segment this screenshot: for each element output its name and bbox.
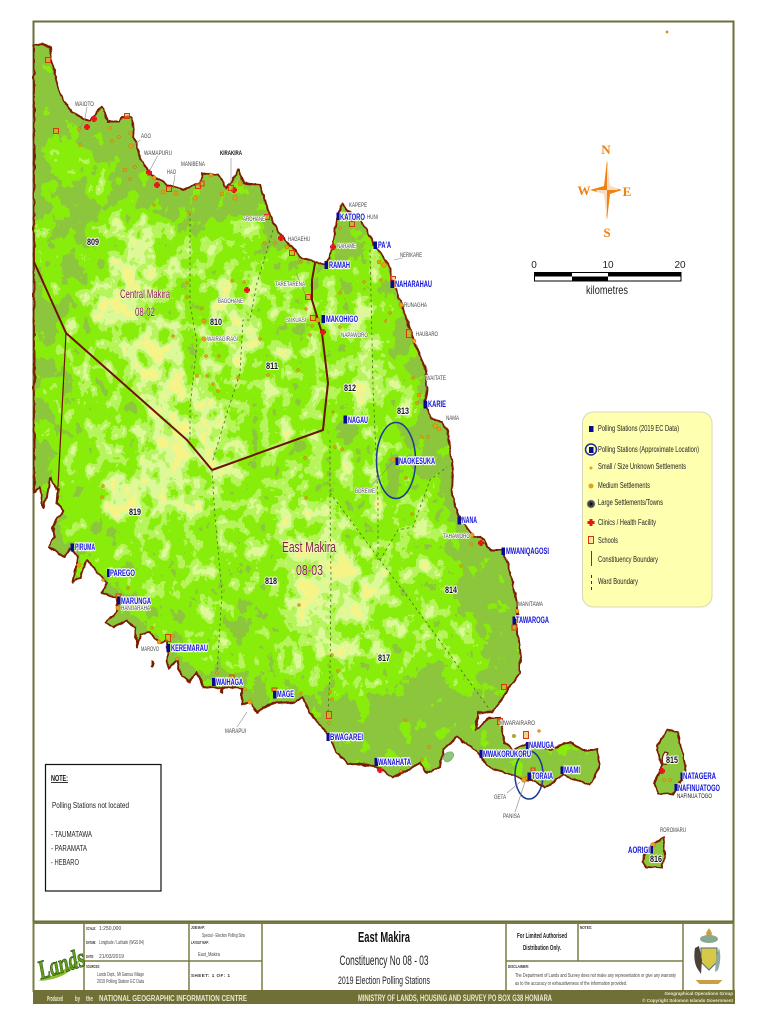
station labels: RAMAH — [329, 260, 350, 270]
compass rose: W — [578, 183, 590, 198]
map info: sources: Lands Dept., Mt Gamua Village — [97, 972, 144, 978]
station squares — [70, 212, 684, 854]
note box: - PARAMATA — [51, 843, 87, 853]
polling station circle: Toraia — [515, 751, 543, 799]
constituency name: East Makira: 08-03 — [296, 562, 323, 579]
legend: large settlements: Large Settlements/Towns — [598, 498, 663, 507]
scale bar: 0 — [531, 260, 537, 271]
map info: scale datum date: 21/03/2019 — [99, 954, 124, 960]
notes label: NOTES: — [580, 925, 592, 930]
bay in island 815 — [662, 752, 668, 764]
footer band: NATIONAL GEOGRAPHIC INFORMATION CENTRE — [99, 994, 248, 1003]
ward numbers: 819 — [129, 507, 141, 517]
distribution note: For Limited Authorised — [517, 931, 567, 940]
note box: Polling Stations not located — [52, 800, 129, 810]
station labels: MWAKORUKORU — [483, 749, 531, 759]
settlements — [77, 31, 672, 848]
constituency name: East Makira — [282, 539, 336, 579]
legend: ward boundary: Ward Boundary — [598, 577, 638, 586]
station labels: MWANIQAGOSI — [506, 546, 549, 556]
station labels — [75, 212, 720, 855]
Lands logo — [33, 942, 89, 985]
place labels: WAIRAGIRAGI — [207, 337, 238, 343]
station labels: KEREMARAU — [171, 643, 208, 653]
place labels: HAGAEHU — [288, 237, 310, 243]
ward numbers: 812 — [344, 383, 356, 393]
station labels: MAMI — [564, 765, 580, 775]
legend: medium settlements — [588, 481, 650, 490]
place labels: TAHAWORO — [443, 534, 470, 540]
footer band: Geographical Operations Group — [664, 991, 733, 996]
map info: scale datum date: DATE: — [86, 954, 94, 959]
constituency name: Central Makira: 08-02 — [135, 305, 155, 319]
map info: job and layout: East_Makira — [198, 952, 220, 958]
land fill: main island — [34, 43, 600, 788]
polling station circle: Naokesuka — [376, 422, 416, 498]
footer band: Produced — [47, 994, 63, 1003]
place labels: NERIKARE — [400, 253, 422, 259]
map info: sheet: SHEET: 1 OF: 1 — [191, 973, 230, 978]
small islet — [443, 752, 454, 762]
ward numbers: 815 — [666, 755, 678, 765]
station labels: BWAGAREI — [330, 732, 363, 742]
place labels: MAROVO — [141, 647, 159, 653]
note box: NOTE: — [51, 773, 68, 783]
compass rose — [578, 142, 631, 240]
constituency boundary — [34, 262, 328, 487]
place labels: PANISA — [503, 814, 520, 820]
disclaimer: as to the accuracy or exhaustiveness of the information provided. — [515, 981, 627, 987]
map info: sources: SOURCES: — [86, 964, 100, 969]
station labels: PA'A — [378, 240, 391, 250]
scale bar — [531, 260, 686, 297]
Lands logo: Lands — [33, 942, 89, 985]
station labels: WANAHATA — [378, 757, 411, 767]
place labels: MARAPUI — [225, 729, 246, 735]
map title — [338, 929, 430, 987]
ward numbers: 813 — [397, 406, 409, 416]
place labels: NARAME — [337, 244, 356, 250]
legend: medium settlements: Medium Settlements — [598, 481, 650, 490]
ward numbers — [87, 237, 678, 864]
station labels: TAWAROGA — [516, 615, 549, 625]
map info: job and layout: JOB MAP: — [191, 925, 205, 930]
ward numbers: 816 — [650, 854, 662, 864]
place labels: SUKUASI — [286, 318, 306, 324]
terrain elevation bands — [34, 43, 597, 788]
legend: small settlements: Small / Size Unknown Settlements — [598, 462, 686, 471]
station labels: KARIE — [428, 399, 446, 409]
compass rose: E — [623, 184, 631, 199]
map info: sources: 2019 Polling Station EC Data — [97, 979, 144, 985]
map: land and terrain — [32, 42, 688, 868]
map info: job and layout: Special - Election Polling Stns — [202, 933, 245, 939]
map info: scale datum date: DATUM: — [86, 940, 96, 945]
place labels: WAMAPURU — [144, 151, 172, 157]
station labels: WAIHAGA — [216, 677, 243, 687]
footer band: © Copyright Solomon Islands Government — [642, 997, 733, 1003]
ward numbers: 817 — [378, 653, 390, 663]
place labels: AROHANE — [243, 217, 265, 223]
station labels: NAGAU — [348, 415, 368, 425]
ward numbers: 810 — [210, 317, 222, 327]
legend: constituency boundary — [592, 551, 658, 566]
ward numbers: 818 — [265, 576, 277, 586]
place labels: NAFINUA TOGO — [677, 794, 712, 800]
place labels: BAGOHANE — [218, 299, 243, 305]
place labels: RUNAGHA — [404, 303, 427, 309]
legend: schools — [588, 536, 618, 545]
station labels: MAKOHIGO — [326, 314, 358, 324]
constituency name: Central Makira — [120, 287, 170, 319]
footer band — [33, 990, 735, 1004]
place labels: GETA — [494, 795, 506, 801]
clinics — [84, 116, 665, 774]
station labels: NAMUGA — [529, 740, 554, 750]
map info: scale datum date — [86, 926, 144, 960]
place labels: KAPEPE — [349, 203, 367, 209]
station labels: MARUNGA — [121, 596, 151, 606]
place labels: KIRAKIRA — [220, 151, 242, 157]
legend: clinics: Clinics / Health Facility — [598, 518, 656, 527]
schools — [46, 58, 535, 771]
station labels: AORIGI — [628, 845, 650, 855]
station labels: MAGE — [277, 689, 294, 699]
legend: polling stations approximate: Polling Stations (Approximate Location) — [598, 445, 699, 454]
leader lines — [80, 107, 525, 812]
map info: scale datum date: 1:250,000 — [99, 926, 121, 932]
distribution note: Distribution Only. — [523, 943, 561, 952]
place labels: HAUBARO — [416, 332, 438, 338]
note box — [46, 764, 161, 891]
ward boundaries — [190, 213, 490, 713]
place labels: HUNI — [367, 215, 378, 221]
map title: 2019 Election Polling Stations — [338, 975, 430, 987]
ward numbers: 809 — [87, 237, 99, 247]
legend: constituency boundary: Constituency Boundary — [598, 555, 658, 564]
note box: - HEBARO — [51, 857, 79, 867]
place labels: NAMA — [446, 416, 459, 422]
disclaimer — [508, 964, 676, 987]
disclaimer: DISCLAIMER: — [508, 964, 529, 969]
footer band: MINISTRY OF LANDS, HOUSING AND SURVEY PO BOX G38 HONIARA — [358, 993, 552, 1003]
place labels: HANUARAHA — [121, 606, 150, 612]
station labels: NAOKESUKA — [399, 456, 435, 466]
legend panel — [582, 412, 712, 607]
place labels: WAITATE — [426, 376, 446, 382]
station labels: NATAGERA — [683, 771, 716, 781]
legend: small settlements — [590, 462, 686, 471]
note box: - TAUMATAWA — [51, 829, 92, 839]
place labels: MANITAWA — [518, 602, 543, 608]
station labels: NANA — [462, 515, 477, 525]
ward numbers: 811 — [266, 361, 278, 371]
disclaimer: The Department of Lands and Survey does not make any representation or give any warranty — [515, 973, 676, 979]
station labels: PIRUMA — [75, 542, 95, 552]
map info: scale datum date: Longitude / Latitude (WGS 84) — [99, 940, 144, 946]
map title: East Makira — [358, 929, 410, 946]
scale bar: kilometres — [586, 283, 628, 297]
compass rose: N — [601, 142, 611, 157]
station labels: NAFINUATOGO — [678, 783, 720, 793]
station labels: PAREGO — [110, 568, 135, 578]
ward numbers: 814 — [445, 585, 457, 595]
place labels: ROROMARU — [660, 828, 686, 834]
place labels: WAIOTO — [75, 102, 94, 108]
footer band: by — [75, 994, 80, 1003]
place labels: HAO — [167, 170, 176, 176]
station labels: TORAIA — [532, 771, 553, 781]
station labels: KATORO — [340, 212, 365, 222]
coat of arms — [694, 928, 720, 983]
legend: polling stations 2019 — [589, 424, 679, 433]
constituency name: Central Makira: Central Makira — [120, 287, 170, 301]
map info: job and layout: LAYOUT MAP: — [191, 940, 209, 945]
legend: schools: Schools — [598, 536, 618, 545]
map info: sources — [86, 964, 144, 985]
scale bar: 10 — [602, 260, 614, 271]
map info: job and layout — [191, 925, 245, 958]
title block — [33, 923, 733, 991]
legend: large settlements — [587, 498, 663, 508]
place labels — [75, 102, 712, 834]
place labels: MANIBENA — [181, 162, 205, 168]
place labels: BOREWE — [355, 489, 375, 495]
place labels: MWARAIRARO — [500, 721, 535, 727]
compass rose: S — [603, 225, 611, 240]
legend: ward boundary — [592, 575, 638, 593]
legend: polling stations 2019: Polling Stations (2019 EC Data) — [598, 424, 679, 433]
station labels: NAHARAHAU — [395, 279, 432, 289]
place labels: NAPAWORO — [341, 333, 368, 339]
scale bar: 20 — [674, 260, 686, 271]
legend: clinics — [588, 518, 656, 527]
map info: scale datum date: SCALE: — [86, 926, 96, 931]
constituency name: East Makira: East Makira — [282, 539, 336, 556]
footer band: the — [86, 994, 93, 1003]
coastline — [34, 43, 687, 868]
legend: polling stations approximate — [586, 444, 699, 455]
distribution note — [517, 931, 567, 952]
place labels: TARETARENA — [275, 282, 305, 288]
map title: Constituency No 08 - 03 — [340, 952, 429, 968]
place labels: AGO — [141, 134, 151, 140]
